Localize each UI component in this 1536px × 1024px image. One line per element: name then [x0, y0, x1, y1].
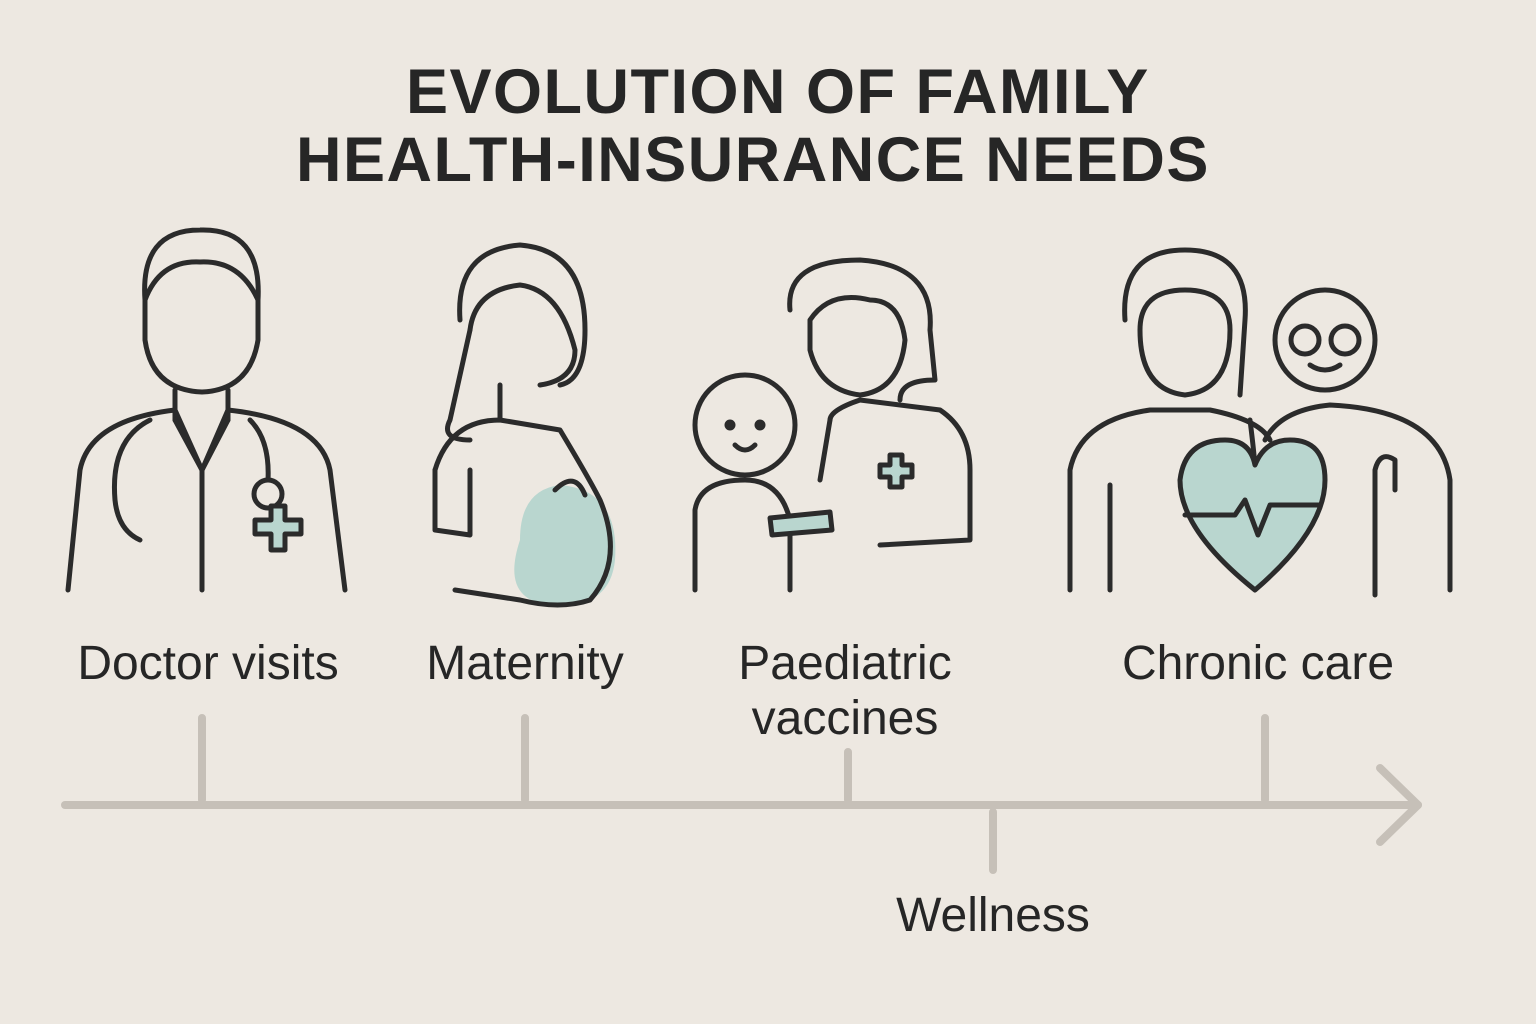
title: HEALTH-INSURANCE NEEDS — [296, 125, 1210, 195]
title: EVOLUTION OF FAMILY — [406, 57, 1150, 127]
label: Wellness: Wellness — [896, 889, 1090, 942]
label: Paediatric vaccines: Paediatric — [738, 637, 952, 690]
icon: nurse with baby — [695, 260, 970, 590]
icon: elderly couple with heart — [1070, 250, 1450, 595]
label: Chronic care: Chronic care — [1122, 637, 1394, 690]
label: Paediatric vaccines: vaccines — [752, 692, 938, 745]
label: Maternity: Maternity — [426, 637, 624, 690]
icon: doctor — [68, 230, 345, 590]
timeline axis with arrow — [65, 718, 1418, 870]
label: Doctor visits: Doctor visits — [77, 637, 339, 690]
label: Paediatric vaccines — [738, 637, 952, 745]
icon: pregnant woman — [435, 245, 615, 605]
title — [296, 57, 1210, 195]
